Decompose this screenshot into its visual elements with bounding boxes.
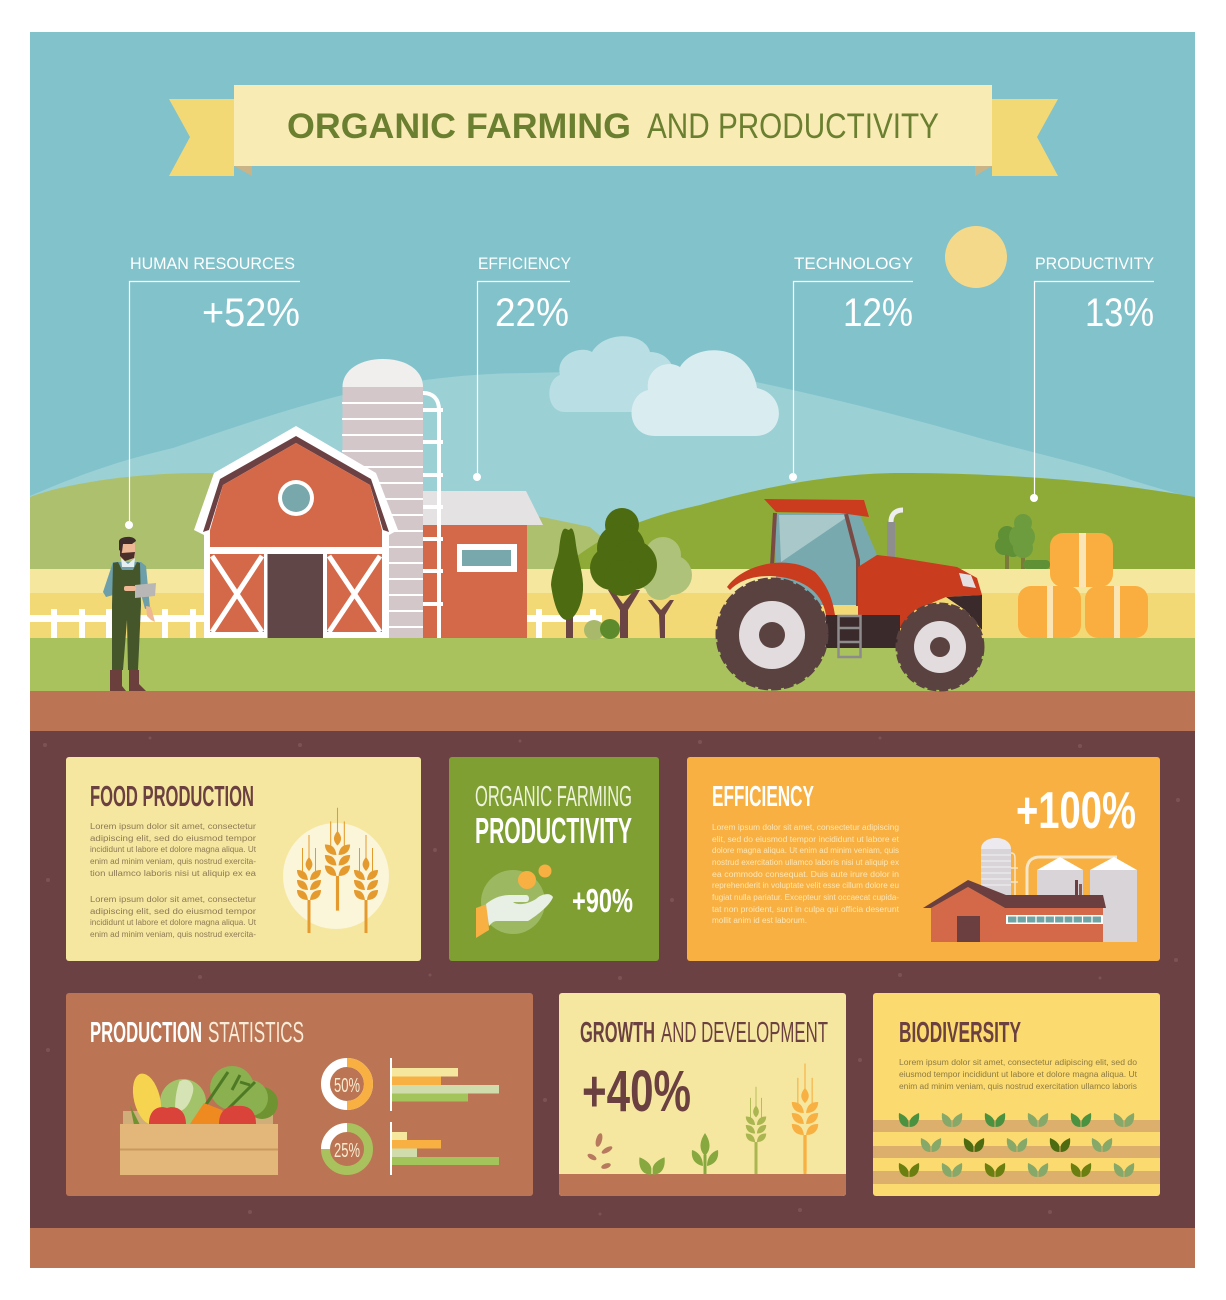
barn centre door	[268, 554, 323, 638]
cloud: front	[632, 350, 779, 436]
barn roof and walls	[194, 426, 398, 638]
panel: food production	[66, 757, 421, 961]
panel: production statistics	[66, 993, 533, 1196]
exhaust	[887, 510, 903, 558]
icon: wheat	[283, 808, 389, 933]
soil strips	[30, 638, 1195, 1268]
cab	[764, 499, 877, 606]
distant pale hills	[30, 372, 1195, 600]
crop rows	[899, 1113, 1134, 1177]
callout: productivity	[1030, 254, 1154, 502]
chassis	[826, 615, 900, 648]
body text: tat non proident, sunt in culpa qui officia deserunt	[712, 905, 900, 914]
icon: seeds	[586, 1132, 613, 1170]
donut chart: 50%	[326, 1062, 368, 1106]
panel: organic farming productivity	[449, 757, 659, 961]
farmer	[103, 537, 156, 691]
stat: +90%	[572, 882, 633, 919]
overalls	[112, 562, 141, 670]
callout: technology: 12%	[843, 291, 913, 335]
heading: ORGANIC FARMING	[475, 781, 632, 813]
title text: ORGANIC FARMING	[287, 107, 631, 146]
body text: incididunt ut labore et dolore magna aliqua. Ut	[90, 845, 257, 854]
donut chart: 50%: 50%	[334, 1075, 360, 1097]
heading: PRODUCTIVITY	[475, 810, 632, 851]
body text: nostrud exercitation ullamco laboris nisi ut aliquip ex	[712, 858, 899, 867]
callout: efficiency: EFFICIENCY	[478, 254, 571, 273]
hay bales	[1018, 533, 1148, 638]
barn right door	[327, 554, 382, 632]
sun	[945, 226, 1007, 288]
body text: fugiat nulla pariatur. Excepteur sint occaecat cupida-	[712, 893, 899, 902]
right hill	[560, 473, 1195, 570]
callout: productivity: PRODUCTIVITY	[1035, 254, 1154, 273]
rear fender	[727, 563, 835, 615]
body text: eiusmod tempor incididunt ut labore et dolore magna aliqua. Ut	[899, 1070, 1138, 1079]
ribbon left tail	[169, 99, 234, 176]
donut chart: 25%: 25%	[334, 1140, 360, 1162]
body text	[899, 1058, 1138, 1091]
callout: efficiency: 22%	[495, 291, 569, 335]
big tree	[590, 508, 657, 638]
panel: growth and development	[559, 993, 846, 1196]
callout: human resources: +52%	[202, 291, 300, 335]
heading: EFFICIENCY	[712, 781, 814, 813]
tablet	[135, 583, 156, 598]
distant trees	[995, 514, 1050, 569]
silo ladder	[423, 393, 443, 638]
bar chart: bottom	[390, 1122, 499, 1175]
shed	[423, 491, 543, 638]
body text: Lorem ipsum dolor sit amet, consectetur adipiscing elit, sed do	[899, 1058, 1138, 1067]
title banner	[169, 85, 1058, 176]
hood	[858, 555, 982, 635]
head	[119, 537, 136, 561]
title text: AND PRODUCTIVITY	[647, 107, 939, 146]
ribbon right tail	[992, 99, 1058, 176]
fence	[30, 609, 602, 638]
body text: dolore magna aliqua. Ut enim ad minim veniam, quis	[712, 846, 899, 855]
cloud: back	[549, 336, 675, 412]
heading: STATISTICS	[208, 1017, 304, 1049]
icon: vegetable crate	[120, 1066, 278, 1175]
heading: GROWTH	[580, 1017, 655, 1049]
hands	[146, 606, 155, 622]
heading	[475, 781, 632, 851]
body text: elit, sed do eiusmod tempor incididunt ut labore et	[712, 835, 900, 844]
body text: Lorem ipsum dolor sit amet, consectetur adipiscing	[712, 823, 899, 832]
callout: human resources	[125, 254, 300, 529]
cypress tree	[551, 528, 583, 638]
callout: human resources: HUMAN RESOURCES	[130, 254, 295, 273]
body text: reprehenderit in voluptate velit esse cillum dolore eu	[712, 881, 899, 890]
front wheel	[896, 604, 984, 690]
pale tree	[639, 537, 692, 638]
body text: incididunt ut labore et dolore magna aliqua. Ut	[90, 918, 257, 927]
callout: productivity: 13%	[1085, 291, 1154, 335]
body text: enim ad minim veniam, quis nostrud exercitation ullamco laboris	[899, 1082, 1137, 1091]
left hill	[30, 473, 640, 570]
bar chart: top	[390, 1058, 499, 1111]
panel: biodiversity	[873, 993, 1160, 1196]
shirt sleeves	[103, 562, 150, 609]
barn left door	[210, 554, 264, 632]
panel: efficiency	[687, 757, 1160, 961]
banner body	[234, 85, 992, 166]
icon: young plant	[692, 1133, 718, 1174]
barn window	[278, 480, 314, 516]
callout: efficiency	[473, 254, 571, 481]
barn	[194, 426, 398, 638]
body text: enim ad minim veniam, quis nostrud exercita-	[90, 857, 256, 866]
body text: enim ad minim veniam, quis nostrud exercita-	[90, 930, 256, 939]
body text: tion ullamco laboris nisi ut aliquip ex ea	[90, 869, 257, 878]
icon: hand with seeds	[476, 864, 553, 938]
title text	[287, 107, 939, 146]
body text: ea commodo consequat. Duis aute irure dolor in	[712, 870, 899, 879]
icon: green wheat	[746, 1087, 766, 1174]
tractor step ladder	[838, 616, 861, 657]
boots	[110, 670, 146, 691]
callout: technology: TECHNOLOGY	[794, 254, 913, 273]
stat: +100%	[1016, 782, 1136, 840]
heading: AND DEVELOPMENT	[661, 1017, 828, 1049]
heading	[580, 1017, 828, 1049]
body text: adipiscing elit, sed do eiusmod tempor	[90, 834, 256, 843]
tractor	[716, 499, 984, 690]
body text: Lorem ipsum dolor sit amet, consectetur	[90, 822, 256, 831]
body text	[90, 822, 257, 939]
stat: +40%	[582, 1059, 691, 1124]
rear wheel	[716, 578, 828, 690]
body text: adipiscing elit, sed do eiusmod tempor	[90, 907, 256, 916]
callout: technology	[789, 254, 913, 481]
bushes	[584, 619, 620, 640]
fields	[30, 569, 1195, 638]
icon: farm building	[923, 838, 1137, 942]
icon: ripe wheat	[792, 1064, 818, 1174]
heading: PRODUCTION	[90, 1017, 202, 1049]
body text	[712, 823, 900, 925]
collar	[121, 558, 135, 567]
soil rows	[873, 1120, 1160, 1184]
icon: sprout	[639, 1157, 665, 1175]
silo	[342, 359, 423, 638]
body text: Lorem ipsum dolor sit amet, consectetur	[90, 895, 256, 904]
heading: FOOD PRODUCTION	[90, 781, 254, 813]
heading: BIODIVERSITY	[899, 1017, 1021, 1049]
body text: mollit anim id est laborum.	[712, 916, 807, 925]
donut chart: 25%	[326, 1128, 368, 1170]
